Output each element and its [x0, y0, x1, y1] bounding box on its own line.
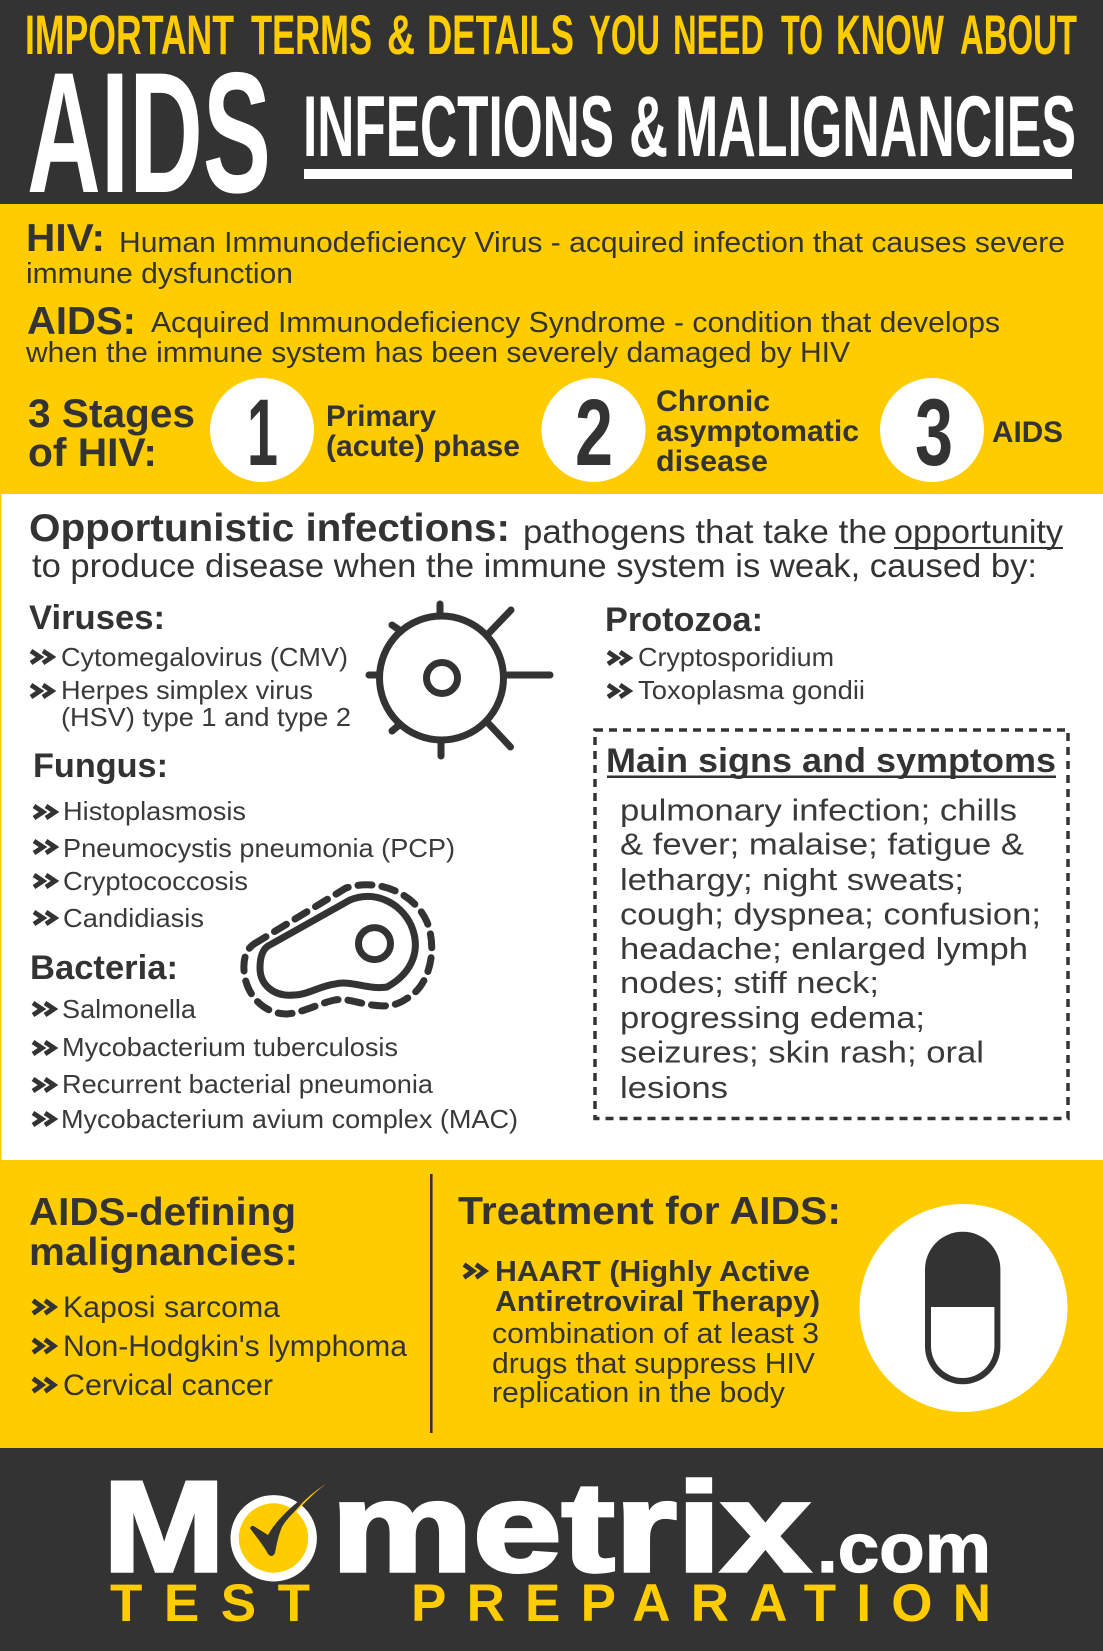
heading: important terms: NEED	[673, 3, 764, 66]
stage 1: (acute) phase	[326, 430, 520, 463]
list item: toxoplasma gondii: Toxoplasma gondii	[638, 675, 865, 705]
text: HAART treatment	[464, 1256, 820, 1409]
heading: opportunistic infections: opportunity	[894, 513, 1064, 550]
list item: mycobacterium tuberculosis: Mycobacterium tuberculosis	[62, 1032, 398, 1062]
stage 1	[210, 378, 520, 486]
stage 3	[880, 378, 1063, 486]
definition: AIDS	[25, 300, 1000, 369]
list item: herpes simplex: Herpes simplex virus	[61, 675, 313, 705]
list item: salmonella: Salmonella	[62, 994, 197, 1024]
subtitle: infections and malignancies: INFECTIONS	[303, 79, 614, 175]
subtitle: infections and malignancies: &	[629, 79, 668, 175]
heading: opportunistic infections	[29, 507, 1064, 584]
heading: important terms: IMPORTANT	[25, 3, 234, 66]
heading: AIDS-defining malignancies: AIDS-defining	[29, 1191, 296, 1234]
text: HAART treatment: combination of at least 3	[492, 1318, 819, 1350]
heading: important terms: &	[387, 3, 415, 66]
heading: opportunistic infections: Opportunistic infections:	[29, 507, 510, 550]
icon: capsule	[860, 1204, 1068, 1412]
text: HAART treatment: HAART (Highly Active	[495, 1256, 810, 1288]
text: HAART treatment: replication in the body	[492, 1377, 786, 1409]
text: symptoms list: cough; dyspnea; confusion;	[620, 896, 1041, 932]
text: symptoms list: lethargy; night sweats;	[620, 862, 964, 897]
logo: Mometrix	[103, 1455, 991, 1599]
text: HAART treatment: Antiretroviral Therapy)	[495, 1286, 820, 1318]
heading: important terms: DETAILS	[427, 3, 574, 66]
tagline: test preparation	[110, 1574, 991, 1633]
list item: herpes simplex	[31, 675, 351, 732]
tagline: test preparation: TEST	[110, 1574, 310, 1633]
callout: main signs and symptoms	[595, 730, 1068, 1118]
heading: important terms	[25, 3, 1077, 66]
text: symptoms list: nodes; stiff neck;	[620, 965, 879, 1000]
text: symptoms list: headache; enlarged lymph	[620, 931, 1028, 966]
heading: protozoa: Protozoa:	[605, 601, 763, 639]
definition: AIDS: AIDS:	[27, 300, 136, 343]
icon: check mark	[250, 1484, 326, 1556]
stage 2: disease	[656, 445, 768, 478]
list item: candidiasis: Candidiasis	[63, 903, 204, 933]
icon: cell	[244, 885, 432, 1014]
list item: mycobacterium avium complex: Mycobacterium avium complex (MAC)	[61, 1104, 518, 1134]
text: HAART treatment: drugs that suppress HIV	[492, 1348, 816, 1380]
definition: HIV: Human Immunodeficiency Virus - acquired infection that causes severe	[119, 227, 1065, 259]
list item: histoplasmosis: Histoplasmosis	[63, 796, 246, 826]
list item: cytomegalovirus: Cytomegalovirus (CMV)	[61, 642, 348, 672]
text: symptoms list: lesions	[620, 1070, 728, 1105]
heading: AIDS-defining malignancies	[29, 1191, 298, 1274]
heading: AIDS-defining malignancies: malignancies:	[29, 1231, 298, 1274]
heading: important terms: KNOW	[836, 3, 944, 66]
panel: malignancies and treatment	[0, 1160, 1103, 1448]
heading: 3 stages of HIV	[28, 392, 195, 475]
list item: cervical cancer: Cervical cancer	[63, 1369, 273, 1402]
tagline: test preparation: PREPARATION	[411, 1574, 991, 1633]
stage 1: Primary	[326, 400, 436, 433]
heading: 3 stages of HIV: of HIV:	[28, 431, 157, 475]
heading: main signs and symptoms: Main signs and symptoms	[606, 742, 1056, 780]
stage 2: asymptomatic	[656, 415, 859, 448]
heading: important terms: TERMS	[251, 3, 372, 66]
stage 1: 1	[247, 380, 278, 486]
list item: cryptococcosis: Cryptococcosis	[63, 866, 248, 896]
list item: non-hodgkin lymphoma: Non-Hodgkin's lymphoma	[63, 1330, 407, 1363]
heading: important terms: TO	[781, 3, 823, 66]
heading: 3 stages of HIV: 3 Stages	[28, 392, 195, 436]
list item: recurrent bacterial pneumonia: Recurrent bacterial pneumonia	[62, 1069, 434, 1099]
list item: herpes simplex: (HSV) type 1 and type 2	[61, 702, 351, 732]
list item: kaposi sarcoma: Kaposi sarcoma	[63, 1291, 280, 1324]
heading: treatment for AIDS: Treatment for AIDS:	[458, 1190, 841, 1233]
heading: opportunistic infections: pathogens that take the	[523, 513, 887, 550]
text: symptoms list: & fever; malaise; fatigue &	[620, 826, 1024, 862]
icon: virus	[369, 604, 550, 756]
panel: header	[0, 0, 1103, 229]
heading: important terms: YOU	[589, 3, 660, 66]
stage 2: Chronic	[656, 385, 770, 418]
subtitle: infections and malignancies	[303, 79, 1076, 179]
list item: cryptosporidium: Cryptosporidium	[638, 642, 834, 672]
logo: Mometrix: M	[103, 1455, 225, 1599]
heading: opportunistic infections: to produce disease when the immune system is weak, caused by:	[32, 547, 1037, 584]
text: symptoms list	[620, 792, 1041, 1105]
text: symptoms list: seizures; skin rash; oral	[620, 1034, 984, 1070]
list item: pneumocystis: Pneumocystis pneumonia (PCP)	[63, 833, 455, 863]
panel: definitions and stages	[0, 204, 1103, 494]
text: symptoms list: progressing edema;	[620, 1000, 925, 1035]
definition: HIV: HIV:	[26, 217, 105, 260]
heading: fungus: Fungus:	[33, 747, 168, 785]
stage 3: 3	[915, 380, 953, 486]
logo: Mometrix: .com	[817, 1509, 991, 1587]
stage 2	[542, 378, 859, 486]
heading: viruses: Viruses:	[29, 599, 165, 637]
text: symptoms list: pulmonary infection; chills	[620, 792, 1017, 828]
definition: AIDS: when the immune system has been severely damaged by HIV	[25, 337, 851, 369]
title: AIDS: AIDS	[27, 37, 271, 229]
stage 2: 2	[575, 380, 613, 486]
definition: HIV	[26, 217, 1065, 290]
heading: bacteria: Bacteria:	[30, 949, 178, 987]
definition: AIDS: Acquired Immunodeficiency Syndrome - condition that develops	[151, 307, 1000, 339]
panel: opportunistic infections	[0, 494, 1103, 1160]
logo: Mometrix: metrix	[331, 1456, 810, 1598]
definition: HIV: immune dysfunction	[26, 258, 293, 290]
stage 3: AIDS	[992, 416, 1063, 449]
panel: footer	[0, 1448, 1103, 1651]
